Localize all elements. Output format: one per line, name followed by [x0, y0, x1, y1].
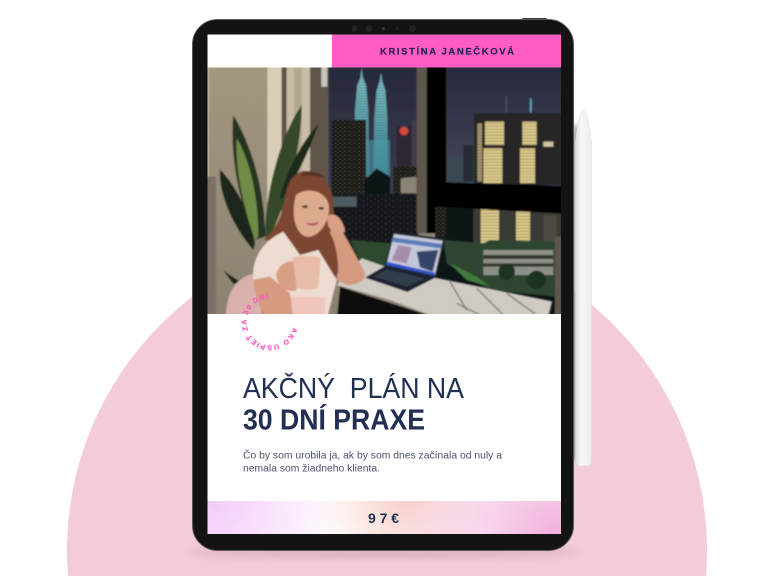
woman — [253, 171, 365, 320]
title line two: 30 DNÍ PRAXE — [243, 402, 425, 436]
marble desk — [337, 258, 552, 320]
pink trousers — [290, 296, 325, 314]
wall and curtains — [208, 68, 446, 314]
title line one: AKČNÝ PLÁN NA — [243, 371, 465, 405]
circular badge text: AKO USPIEŤ ZA 30 DNÍ — [242, 292, 297, 350]
stylus pencil — [572, 110, 592, 466]
pink background circle — [67, 231, 707, 576]
hand at ear — [327, 214, 345, 237]
header band — [332, 34, 561, 68]
hand on mug — [276, 261, 297, 291]
photo: woman with laptop by night city window — [203, 63, 567, 320]
night city window left — [328, 63, 420, 273]
plant — [220, 105, 318, 284]
price: 97€ — [368, 510, 399, 526]
tablet — [192, 18, 574, 551]
Petronas towers — [354, 68, 369, 177]
laptop — [365, 231, 445, 292]
arm on desk — [329, 230, 366, 286]
mug — [293, 256, 321, 290]
description: Čo by som urobila ja, ak by som dnes začínala od nuly a — [243, 448, 502, 462]
camera dots — [352, 25, 416, 32]
author name: KRISTÍNA JANEČKOVÁ — [380, 46, 514, 58]
face — [294, 191, 329, 237]
night city window right — [435, 63, 567, 320]
shirt — [253, 232, 337, 320]
forearm — [253, 276, 294, 314]
description: nemala som žiadneho klienta. — [243, 462, 380, 474]
chair — [225, 274, 263, 314]
window frame — [417, 63, 447, 233]
tablet drop shadow — [185, 546, 581, 558]
top side button — [522, 18, 547, 21]
tablet body — [192, 20, 574, 550]
horizontal window bar — [434, 182, 567, 214]
description — [243, 448, 502, 474]
screen — [208, 34, 561, 534]
hair — [263, 171, 338, 277]
price band — [208, 501, 561, 534]
